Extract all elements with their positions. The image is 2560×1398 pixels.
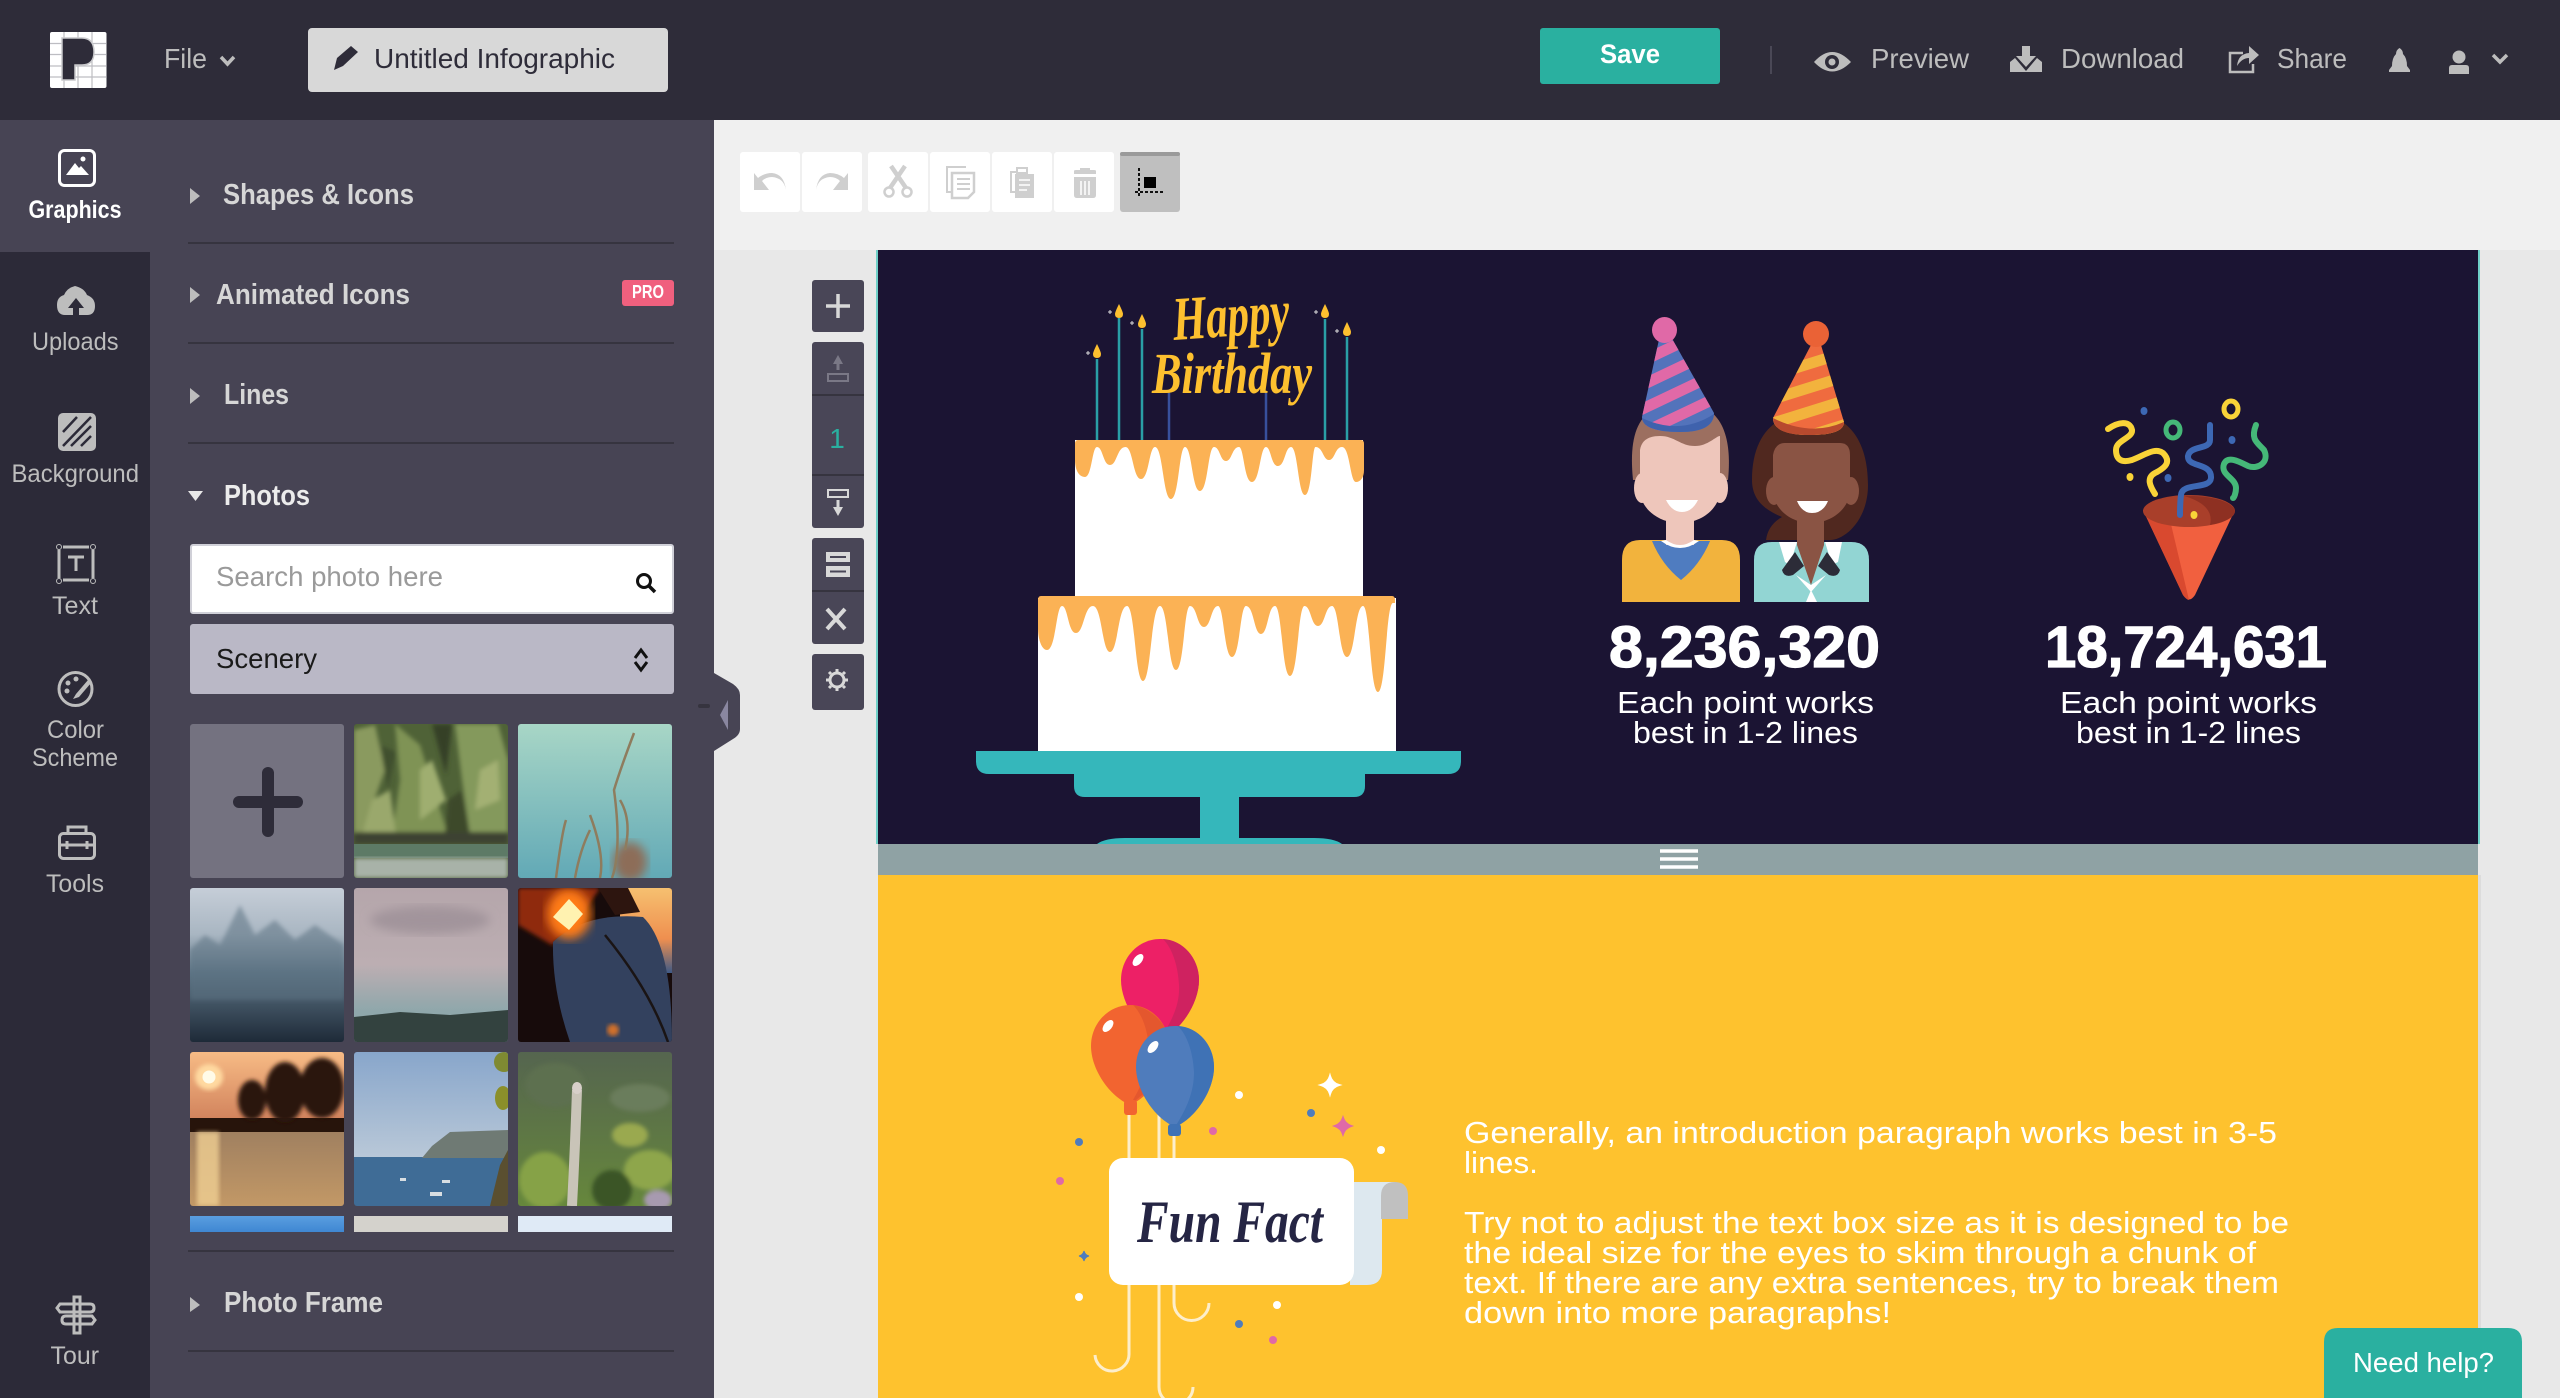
rail item: tools [46,827,104,898]
share action: Share [2277,43,2347,74]
button group: layout and delete [812,538,864,644]
button: redo [802,152,862,212]
share action [2230,43,2347,74]
infographic page: yellow fun fact section [878,875,2481,1398]
section: shapes and icons: Shapes & Icons [223,179,414,211]
stat: second count: 18,724,631 [2045,615,2327,680]
section: photo frame: Photo Frame [224,1287,383,1319]
balloon: blue [1136,1026,1214,1136]
download action: Download [2061,43,2184,74]
photo: hillside plant [518,1052,676,1210]
heading: happy birthday: Happy [1170,278,1292,354]
toolbar strip [714,120,2560,250]
introduction paragraphs: the ideal size for the eyes to skim through a chunk of [1464,1235,2256,1270]
introduction paragraphs: lines. [1464,1145,1538,1180]
category dropdown: Scenery [216,643,317,674]
pro badge [622,280,674,306]
illustration: birthday cake [976,278,1461,844]
photo: grass on teal sky [518,724,672,882]
icon: notifications bell [2389,48,2410,72]
section: animated icons [190,279,674,311]
introduction paragraphs: Try not to adjust the text box size as it is designed to be [1464,1205,2289,1240]
section navigator [812,342,864,528]
rail item: background: Background [12,460,139,488]
stat: second count [2045,615,2327,750]
search photo field: Search photo here [216,561,443,592]
person: woman [1752,321,1869,602]
button: copy [930,152,990,212]
category dropdown [190,624,674,694]
stat: people count: best in 1-2 lines [1633,715,1858,750]
rail item: text [52,544,98,620]
file menu [164,43,234,74]
stat: people count [1609,615,1880,750]
button: add section [812,280,864,332]
rail item: tour [50,1297,99,1370]
preview action [1814,43,1970,74]
section: lines: Lines [224,379,289,411]
photo: hazy sky over treeline [354,888,508,1042]
introduction paragraphs: Generally, an introduction paragraph works best in 3-5 [1464,1115,2277,1150]
balloon: orange [1091,1005,1169,1115]
illustration: balloons and fun fact banner [1056,939,1408,1398]
balloon: pink [1121,939,1199,1040]
cake tier: top [1075,440,1364,600]
illustration: two people in party hats [1622,317,1869,602]
cake stand [976,751,1461,844]
photo: sunset over lake [190,1052,344,1206]
introduction paragraphs: text. If there are any extra sentences, try to break them [1464,1265,2279,1300]
cake tier: bottom [1038,596,1396,752]
button: undo [740,152,800,212]
top navigation bar [0,0,2560,120]
section: lines [190,379,289,411]
candles [1086,304,1351,440]
confetti dots [1056,1076,1385,1344]
file menu: File [164,43,207,74]
page tools column [812,280,864,710]
section: photos [188,480,310,512]
infographic page: dark stats section [876,250,2480,844]
add photo tile [190,724,344,878]
rail item: color scheme: Color [47,716,104,744]
rail item: tour: Tour [50,1342,99,1370]
photo: foggy forest [190,888,344,1042]
button: paste [992,152,1052,212]
heading: happy birthday [1151,278,1312,406]
panel collapse tab [714,673,740,751]
rail item: tools: Tools [46,870,104,898]
icon: logo [50,32,106,88]
stat: second count: best in 1-2 lines [2076,715,2301,750]
graphics side panel [150,120,714,1398]
canvas workspace background [714,250,2560,1398]
balloon strings [1095,1110,1209,1398]
photo: forest and river [354,724,508,878]
need help button: Need help? [2353,1347,2494,1378]
stat: people count: Each point works [1617,685,1874,720]
icon: user menu [2449,50,2507,74]
rail item: color scheme [32,672,118,772]
search photo field [191,545,673,613]
document title field [308,28,668,92]
illustration: party popper [2108,401,2266,600]
button: delete [1054,152,1114,212]
heading: happy birthday: Birthday [1151,341,1312,406]
rail item: uploads [32,286,118,356]
rail item: color scheme: Scheme [32,744,118,772]
heading: fun fact: Fun Fact [1136,1189,1325,1255]
rail item: graphics (active) [0,120,150,252]
banner scroll [1109,1158,1408,1285]
left icon rail [0,120,150,1398]
button: settings [812,654,864,710]
save button: Save [1600,39,1660,69]
stat: people count: 8,236,320 [1609,615,1880,680]
save button [1540,28,1720,84]
section navigator: 1 [829,423,845,454]
need help button [2324,1328,2522,1398]
button: snap to grid (active) [1120,152,1180,212]
photo: sunset behind figure [518,888,672,1042]
person: man [1622,317,1740,602]
introduction paragraphs [1464,1115,2289,1330]
section: animated icons: Animated Icons [216,279,410,311]
section resize handle [878,844,2478,875]
button: cut [868,152,928,212]
edit toolbar [740,152,1180,212]
rail item: uploads: Uploads [32,328,118,356]
rail item: text: Text [52,592,98,620]
preview action: Preview [1871,43,1970,74]
introduction paragraphs: down into more paragraphs! [1464,1295,1891,1330]
pro badge: PRO [632,282,664,302]
stat: second count: Each point works [2060,685,2317,720]
document title field: Untitled Infographic [374,43,615,74]
section: photos: Photos [224,480,310,512]
photo: coastal bay [354,1052,514,1206]
rail item: background [12,413,139,488]
photo grid [190,724,676,1232]
rail item: graphics (active): Graphics [28,196,122,224]
photo row cut off by scroll [190,1216,672,1232]
